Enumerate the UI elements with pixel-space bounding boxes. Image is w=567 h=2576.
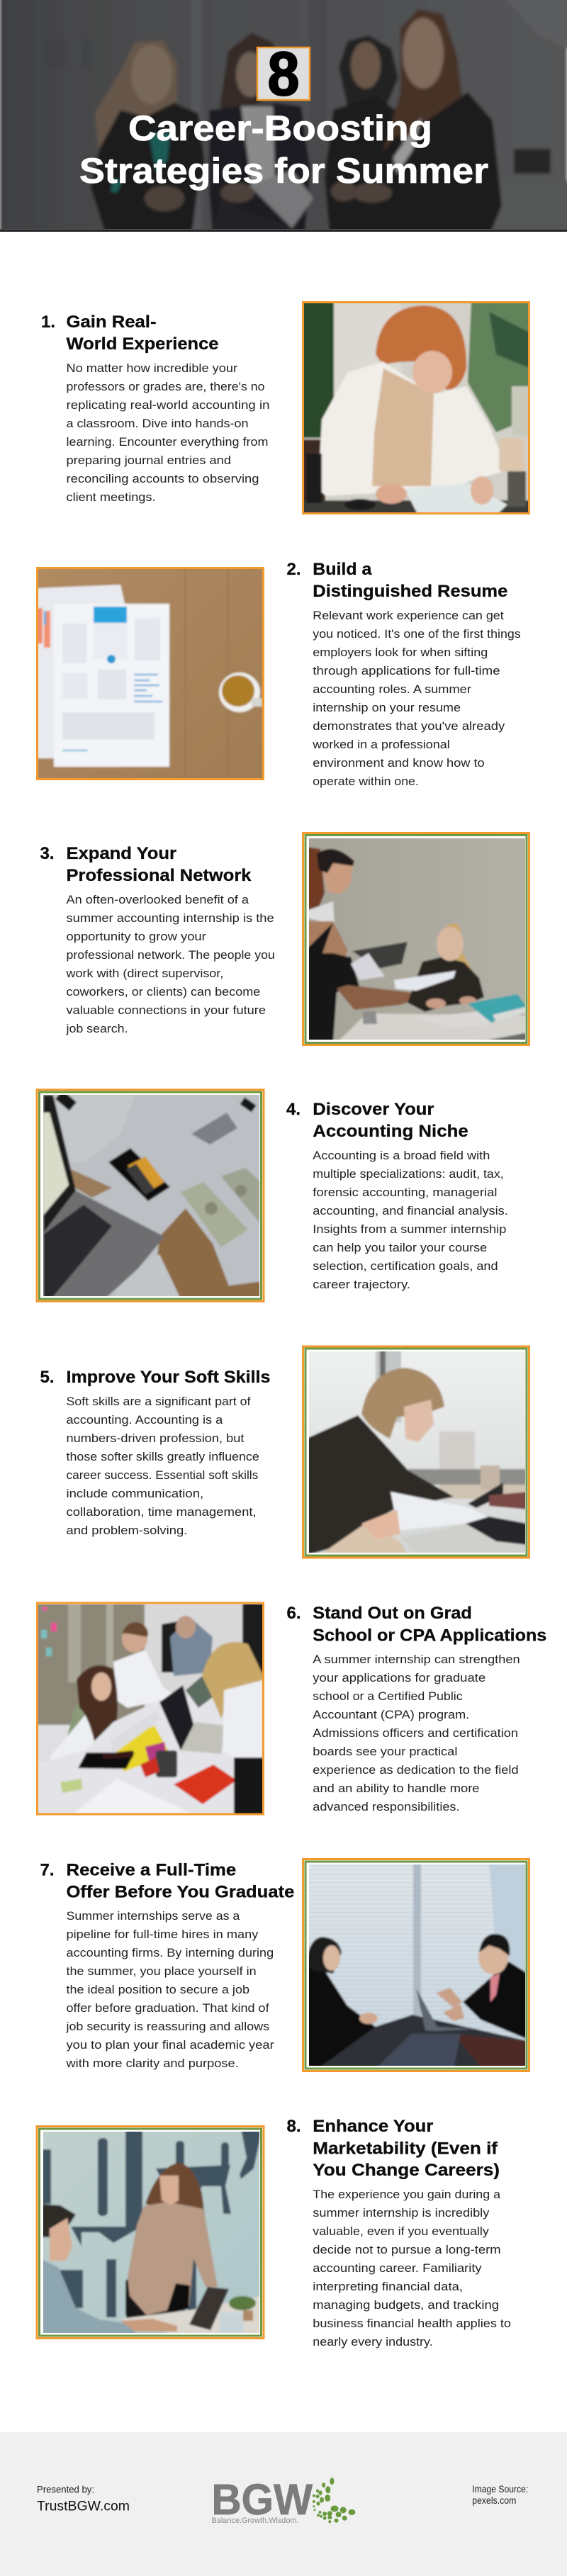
body text 6: Admissions officers and certification [313,1727,518,1740]
heading 1: Gain Real- [67,313,157,332]
heading 8 [313,2117,500,2180]
number 3: 3. [40,844,55,863]
photo 6: team meeting around a table [35,1602,265,1816]
number badge: 8 [268,40,299,108]
heading 8: Marketability (Even if [313,2139,498,2159]
body text 5: and problem-solving. [67,1524,187,1537]
body text 3: summer accounting internship is the [67,912,274,925]
body text 3 [65,894,275,1035]
photo 4: laptop, calculator, cash and reports [37,1090,264,1301]
body text 7: you to plan your final academic year [67,2039,274,2052]
number 5: 5. [40,1368,55,1387]
body text 7: with more clarity and purpose. [65,2057,239,2070]
body text 6: Accountant (CPA) program. [313,1709,469,1721]
panel: step 5 improve your soft skills [40,1346,529,1558]
heading 3: Professional Network [67,866,252,885]
heading 8: Enhance Your [313,2117,433,2136]
heading 2 [313,560,507,601]
body text 2 [312,609,521,788]
body text 5: Soft skills are a significant part of [67,1395,251,1408]
woman 1 [95,40,177,157]
header photo: four businesswomen, darkened [0,0,567,237]
panel: step 4 discover your accounting niche [37,1090,508,1301]
body text 5: collaboration, time management, [67,1506,257,1519]
body text 3: work with (direct supervisor, [65,967,223,980]
body text 5: numbers-driven profession, but [67,1432,245,1445]
body text 1 [67,362,269,504]
photo 3: colleagues exchanging documents [303,833,529,1045]
woman 4 [383,9,466,152]
number 8: 8. [286,2117,301,2136]
heading 4 [313,1100,468,1141]
body text 3: coworkers, or clients) can become [67,986,260,999]
body text 6: experience as dedication to the field [313,1764,519,1777]
heading 3 [67,844,252,885]
body text 2: you noticed. It's one of the first things [313,628,521,641]
body text 4: career trajectory. [313,1278,410,1291]
body text 2: worked in a professional [312,738,450,751]
body text 4: selection, certification goals, and [313,1260,498,1273]
heading 6: Stand Out on Grad [313,1604,472,1623]
heading 7: Offer Before You Graduate [67,1882,294,1902]
body text 8 [313,2188,511,2349]
body text 2: demonstrates that you've already [313,720,505,733]
body text 6: and an ability to handle more [313,1782,479,1795]
body text 1: No matter how incredible your [67,362,238,375]
heading 4: Discover Your [313,1100,434,1119]
body text 2: operate within one. [313,775,419,788]
body text 5 [67,1395,259,1537]
body text 7: job security is reassuring and allows [65,2020,269,2033]
presented by: Presented by: [37,2483,94,2495]
body text 6: advanced responsibilities. [313,1801,459,1813]
presented by: TrustBGW.com [37,2499,130,2514]
body text 1: learning. Encounter everything from [67,436,268,449]
body text 5: include communication, [67,1487,203,1500]
body text 7: the ideal position to secure a job [67,1984,249,1996]
body text 6: school or a Certified Public [313,1690,463,1703]
woman 3 [339,35,398,106]
number 4: 4. [286,1100,301,1119]
body text 8: valuable, even if you eventually [313,2225,490,2238]
body text 1: replicating real-world accounting in [67,399,269,412]
title [79,108,488,191]
body text 4: multiple specializations: audit, tax, [313,1168,504,1181]
body text 4: forensic accounting, managerial [313,1186,498,1199]
body text 8: summer internship is incredibly [313,2207,490,2220]
title: Strategies for Summer [79,151,488,191]
number 2: 2. [286,560,301,579]
panel: step 8 enhance your marketability [37,2117,511,2349]
body text 2: accounting roles. A summer [313,683,471,696]
panel: step 7 receive a full-time offer before you graduate [40,1860,529,2071]
body text 1: a classroom. Dive into hands-on [67,417,248,430]
panel: step 1 gain real-world experience [41,300,531,515]
body text 8: nearly every industry. [313,2336,433,2349]
body text 7: Summer internships serve as a [67,1910,240,1923]
body text 5: those softer skills greatly influence [67,1451,259,1463]
body text 8: accounting career. Familiarity [313,2262,483,2275]
heading 1: World Experience [67,334,218,354]
body text 3: job search. [65,1023,128,1035]
heading 6 [313,1604,546,1646]
body text 4: can help you tailor your course [313,1242,487,1254]
panel: step 2 build a distinguished resume [35,560,521,788]
panel: step 6 stand out on grad school or CPA applications [35,1602,546,1816]
number 6: 6. [286,1604,301,1623]
heading 3: Expand Your [67,844,176,863]
body text 4: Insights from a summer internship [313,1223,506,1236]
title: Career-Boosting [128,108,432,148]
body text 7: offer before graduation. That kind of [67,2002,269,2015]
body text 2: through applications for full-time [313,665,500,677]
body text 1: reconciling accounts to observing [67,473,259,485]
image source [472,2484,528,2506]
body text 5: accounting. Accounting is a [67,1414,223,1427]
logo: BGW Balance.Growth.Wisdom.: BGW [211,2475,313,2524]
photo 2: resume on wooden table [35,566,265,781]
body text 7 [65,1910,274,2070]
heading 2: Distinguished Resume [313,582,507,601]
body text 7: accounting firms. By interning during [67,1947,274,1959]
number 7: 7. [40,1861,55,1879]
body text 5: career success. Essential soft skills [67,1469,258,1482]
body text 8: business financial health applies to [313,2317,511,2330]
photo 1: woman with red hair reviewing papers [301,300,531,515]
image source: Image Source: [472,2484,528,2495]
number 1: 1. [41,313,55,332]
photo 7: two professionals talking at a conference table [303,1860,529,2071]
heading 7 [67,1861,294,1902]
body text 2: internship on your resume [313,702,461,714]
logo: BGW Balance.Growth.Wisdom.: Balance.Growth.Wisdom. [211,2516,299,2525]
body text 1: professors or grades are, there's no [67,381,265,393]
icon: green leaf of dots [313,2477,355,2523]
footer background [0,2432,567,2576]
presented by [37,2483,130,2514]
heading 4: Accounting Niche [313,1122,468,1141]
body text 3: opportunity to grow your [67,930,206,943]
panel: step 3 expand your professional network [40,833,529,1045]
body text 1: preparing journal entries and [67,454,231,467]
photo 8: woman standing beside seated colleague in front of mural [37,2126,264,2339]
body text 7: the summer, you place yourself in [67,1965,257,1978]
woman 2 [220,33,275,111]
body text 6: your applications for graduate [313,1672,485,1684]
body text 3: valuable connections in your future [67,1004,266,1017]
body text 7: pipeline for full-time hires in many [67,1928,259,1941]
body text 2: employers look for when sifting [313,646,488,659]
body text 6 [313,1653,520,1813]
photo 5: woman checking figures with a calculator [303,1346,529,1558]
footer [0,2432,567,2576]
body text 8: managing budgets, and tracking [313,2299,499,2312]
body text 8: decide not to pursue a long-term [313,2244,501,2256]
header banner [0,0,567,237]
body text 6: boards see your practical [313,1745,457,1758]
body text 8: The experience you gain during a [313,2188,500,2201]
body text 6: A summer internship can strengthen [313,1653,520,1666]
body text 4: Accounting is a broad field with [313,1149,490,1162]
body text 2: environment and know how to [313,757,485,770]
body text 3: An often-overlooked benefit of a [67,894,249,906]
body text 8: interpreting financial data, [313,2280,463,2293]
heading 7: Receive a Full-Time [67,1861,236,1879]
body text 2: Relevant work experience can get [313,609,504,622]
heading 1 [67,313,218,354]
number badge [257,40,310,108]
body text 1: client meetings. [67,491,156,504]
body text 4 [313,1149,508,1291]
heading 6: School or CPA Applications [313,1626,546,1646]
heading 8: You Change Careers) [313,2161,500,2180]
body text 3: professional network. The people you [67,949,275,962]
body text 4: accounting, and financial analysis. [313,1205,508,1217]
heading 2: Build a [313,560,372,579]
image source: pexels.com [472,2495,516,2506]
heading 5: Improve Your Soft Skills [67,1368,271,1387]
